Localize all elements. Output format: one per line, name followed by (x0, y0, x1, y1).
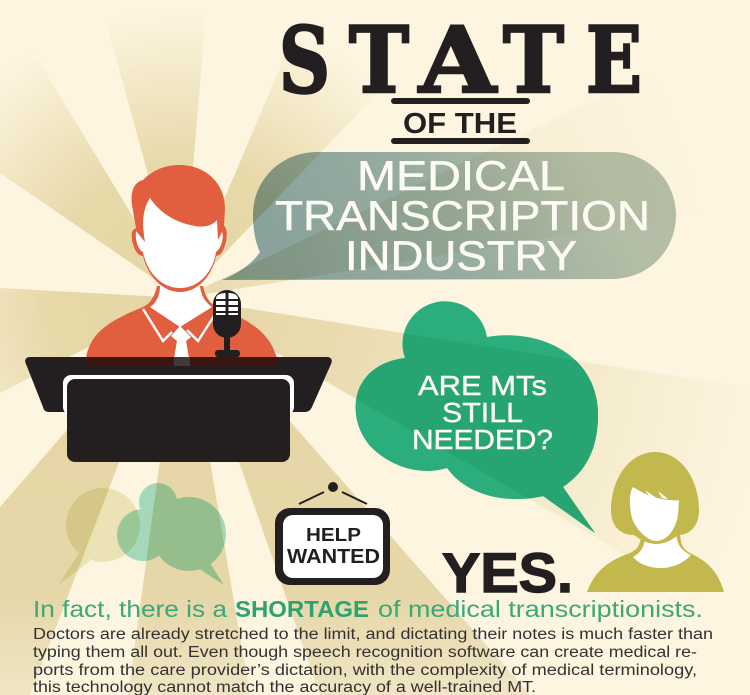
woman: fringe highlights (645, 490, 668, 499)
speech bubble: medical transcription industry: TRANSCRIPTION (275, 192, 650, 239)
green speech bubble: are MTs still needed: STILL (442, 397, 523, 428)
heading: YES: YES. (442, 541, 573, 604)
title: STATE: S (279, 8, 330, 114)
body text: ports from the care provider’s dictation, with the complexity of medical terminology, (33, 662, 697, 679)
body text: typing them all out. Even though speech recognition software can create medical re- (33, 644, 697, 661)
man: body (86, 286, 277, 368)
green speech bubble: are MTs still needed: ARE MTs (418, 370, 547, 401)
icon: help wanted sign (275, 482, 390, 585)
icon: help wanted sign: HELP (306, 524, 361, 545)
speech bubble: medical transcription industry: MEDICAL (357, 152, 565, 199)
man: face (136, 198, 223, 288)
subheading: shortage: In fact, there is a (33, 596, 227, 622)
title: STATE: E (586, 8, 642, 114)
title: STATE: T (503, 8, 564, 114)
man: collar (143, 309, 172, 341)
title: STATE (279, 8, 642, 114)
woman: hair (611, 452, 699, 544)
subheading: shortage: SHORTAGE (235, 596, 369, 622)
man at podium (86, 165, 277, 368)
woman: body (587, 530, 724, 592)
title: STATE: A (418, 8, 498, 114)
woman (587, 452, 724, 592)
subtitle: OF THE (391, 98, 530, 144)
icon: help wanted sign: WANTED (287, 546, 380, 568)
subheading: shortage: of medical transcriptionists. (378, 596, 703, 622)
subheading: shortage (33, 596, 703, 622)
green speech bubble: are MTs still needed (356, 301, 598, 533)
speech bubble: medical transcription industry (222, 152, 676, 280)
small green speech bubble (117, 483, 226, 585)
title: STATE: T (349, 8, 409, 114)
podium (25, 357, 332, 462)
body text (33, 626, 713, 695)
body text: Doctors are already stretched to the limit, and dictating their notes is much faster than (33, 626, 713, 643)
icon: microphone (213, 290, 241, 357)
small olive speech bubble (58, 488, 140, 585)
man: hair and head outline (132, 165, 227, 292)
woman: face (630, 487, 679, 541)
green speech bubble: are MTs still needed: NEEDED? (412, 424, 553, 455)
woman: neck (633, 530, 691, 568)
man: right collar (187, 316, 214, 341)
man: tie (171, 326, 191, 358)
man: neck (150, 286, 212, 327)
speech bubble: medical transcription industry: INDUSTRY (345, 232, 577, 279)
subtitle: OF THE: OF THE (403, 108, 517, 140)
